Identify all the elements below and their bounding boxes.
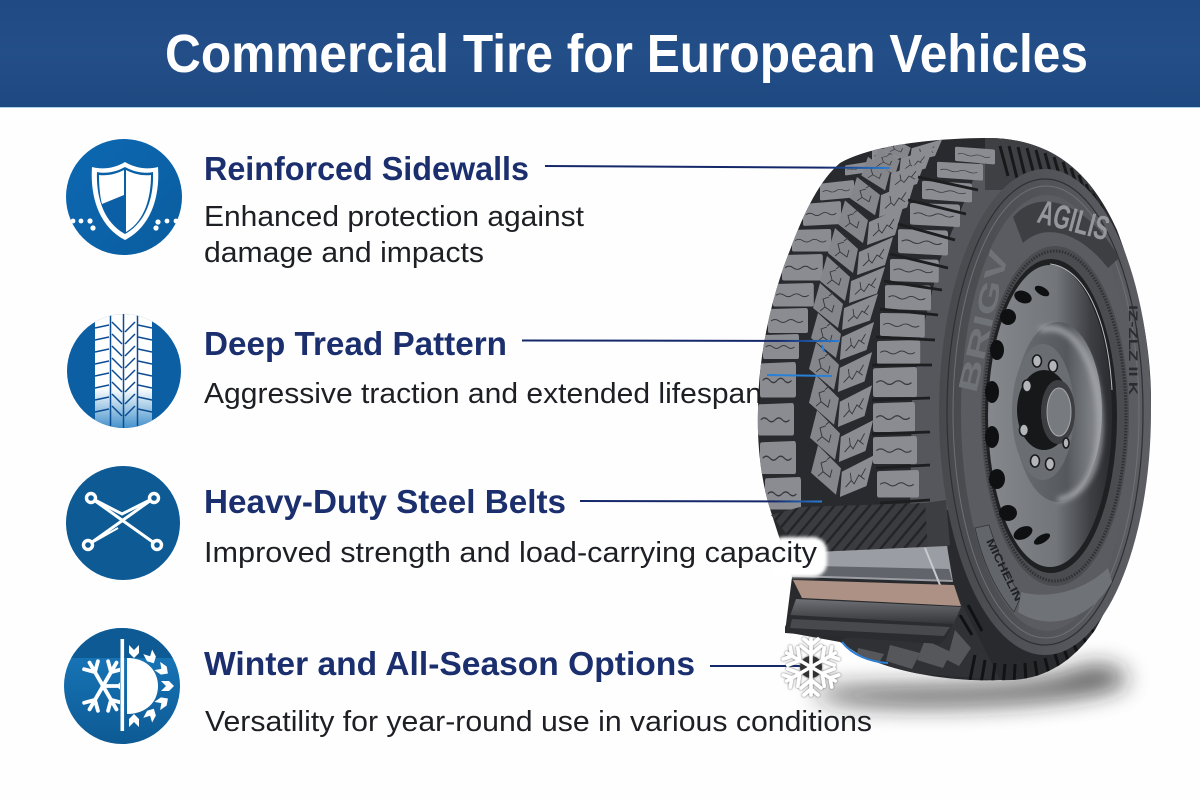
description: deep tread: Aggressive traction and extended lifespan — [204, 378, 762, 410]
tire tread body — [758, 130, 1160, 680]
wheel dish — [1014, 322, 1102, 502]
callout: winter options — [710, 642, 888, 666]
sidewall plate — [975, 525, 1021, 612]
center chevron tread blocks — [809, 136, 942, 497]
wheel bolts — [1020, 355, 1069, 470]
feature 1 text — [204, 150, 584, 269]
icon: steel belts — [66, 466, 180, 580]
description: winter: Versatility for year-round use in various conditions — [205, 706, 872, 738]
left shoulder tread blocks — [758, 146, 900, 510]
description: reinforced sidewalls: Enhanced protection against — [204, 201, 584, 233]
callout: steel belts — [580, 500, 822, 502]
wheel hub — [1017, 370, 1071, 450]
callout lines — [522, 166, 890, 666]
sidewall size text: IZ-ZLZ II K — [1126, 305, 1140, 396]
heading: steel belts: Heavy-Duty Steel Belts — [204, 483, 566, 520]
callout: reinforced sidewalls — [545, 166, 890, 168]
dark base layer — [785, 615, 953, 644]
tire illustration — [758, 130, 1160, 706]
sidewall side model text: BRIGV — [953, 247, 1014, 395]
callout: deep tread pattern — [522, 340, 840, 376]
right shoulder band — [910, 163, 1002, 510]
feature 2 text — [204, 325, 762, 410]
tire cutaway layers — [771, 500, 961, 644]
heading: deep tread: Deep Tread Pattern — [204, 325, 507, 362]
icon: shield — [66, 139, 182, 255]
ground shadow — [812, 665, 1127, 706]
right column tread blocks — [873, 146, 995, 498]
description: reinforced sidewalls: damage and impacts — [204, 237, 484, 269]
shoulder groove slots — [872, 177, 978, 503]
steel belt layers — [790, 546, 953, 582]
sidewall lower band — [1018, 568, 1112, 622]
top shoulder ribs — [985, 138, 1103, 208]
icon: snowflake on tire — [782, 639, 840, 695]
wheel vent holes — [985, 284, 1052, 547]
heading: reinforced sidewalls: Reinforced Sidewalls — [204, 150, 529, 187]
icon: tread — [67, 310, 181, 430]
bottom tread — [850, 604, 1094, 680]
header banner — [0, 0, 1200, 108]
white label backing — [770, 537, 827, 577]
steel wheel — [981, 246, 1129, 586]
icon: winter and summer — [60, 625, 184, 744]
hatched rubber layer — [771, 503, 948, 556]
gray inner layer — [790, 599, 961, 625]
sidewall — [939, 169, 1151, 655]
sidewall upper brand band — [1013, 202, 1119, 268]
feature 3 text — [204, 483, 818, 569]
tan ply layer — [793, 580, 961, 606]
title: Commercial Tire for European Vehicles — [165, 24, 1088, 84]
sidewall plate marking: MICHELIN — [983, 537, 1024, 603]
brand text AGILIS: AGILIS — [1034, 193, 1113, 248]
feature 4 text — [204, 645, 872, 738]
description: steel belts: Improved strength and load-carrying capacity — [204, 537, 818, 569]
description: reinforced sidewalls — [204, 201, 584, 269]
heading: winter: Winter and All-Season Options — [204, 645, 695, 682]
